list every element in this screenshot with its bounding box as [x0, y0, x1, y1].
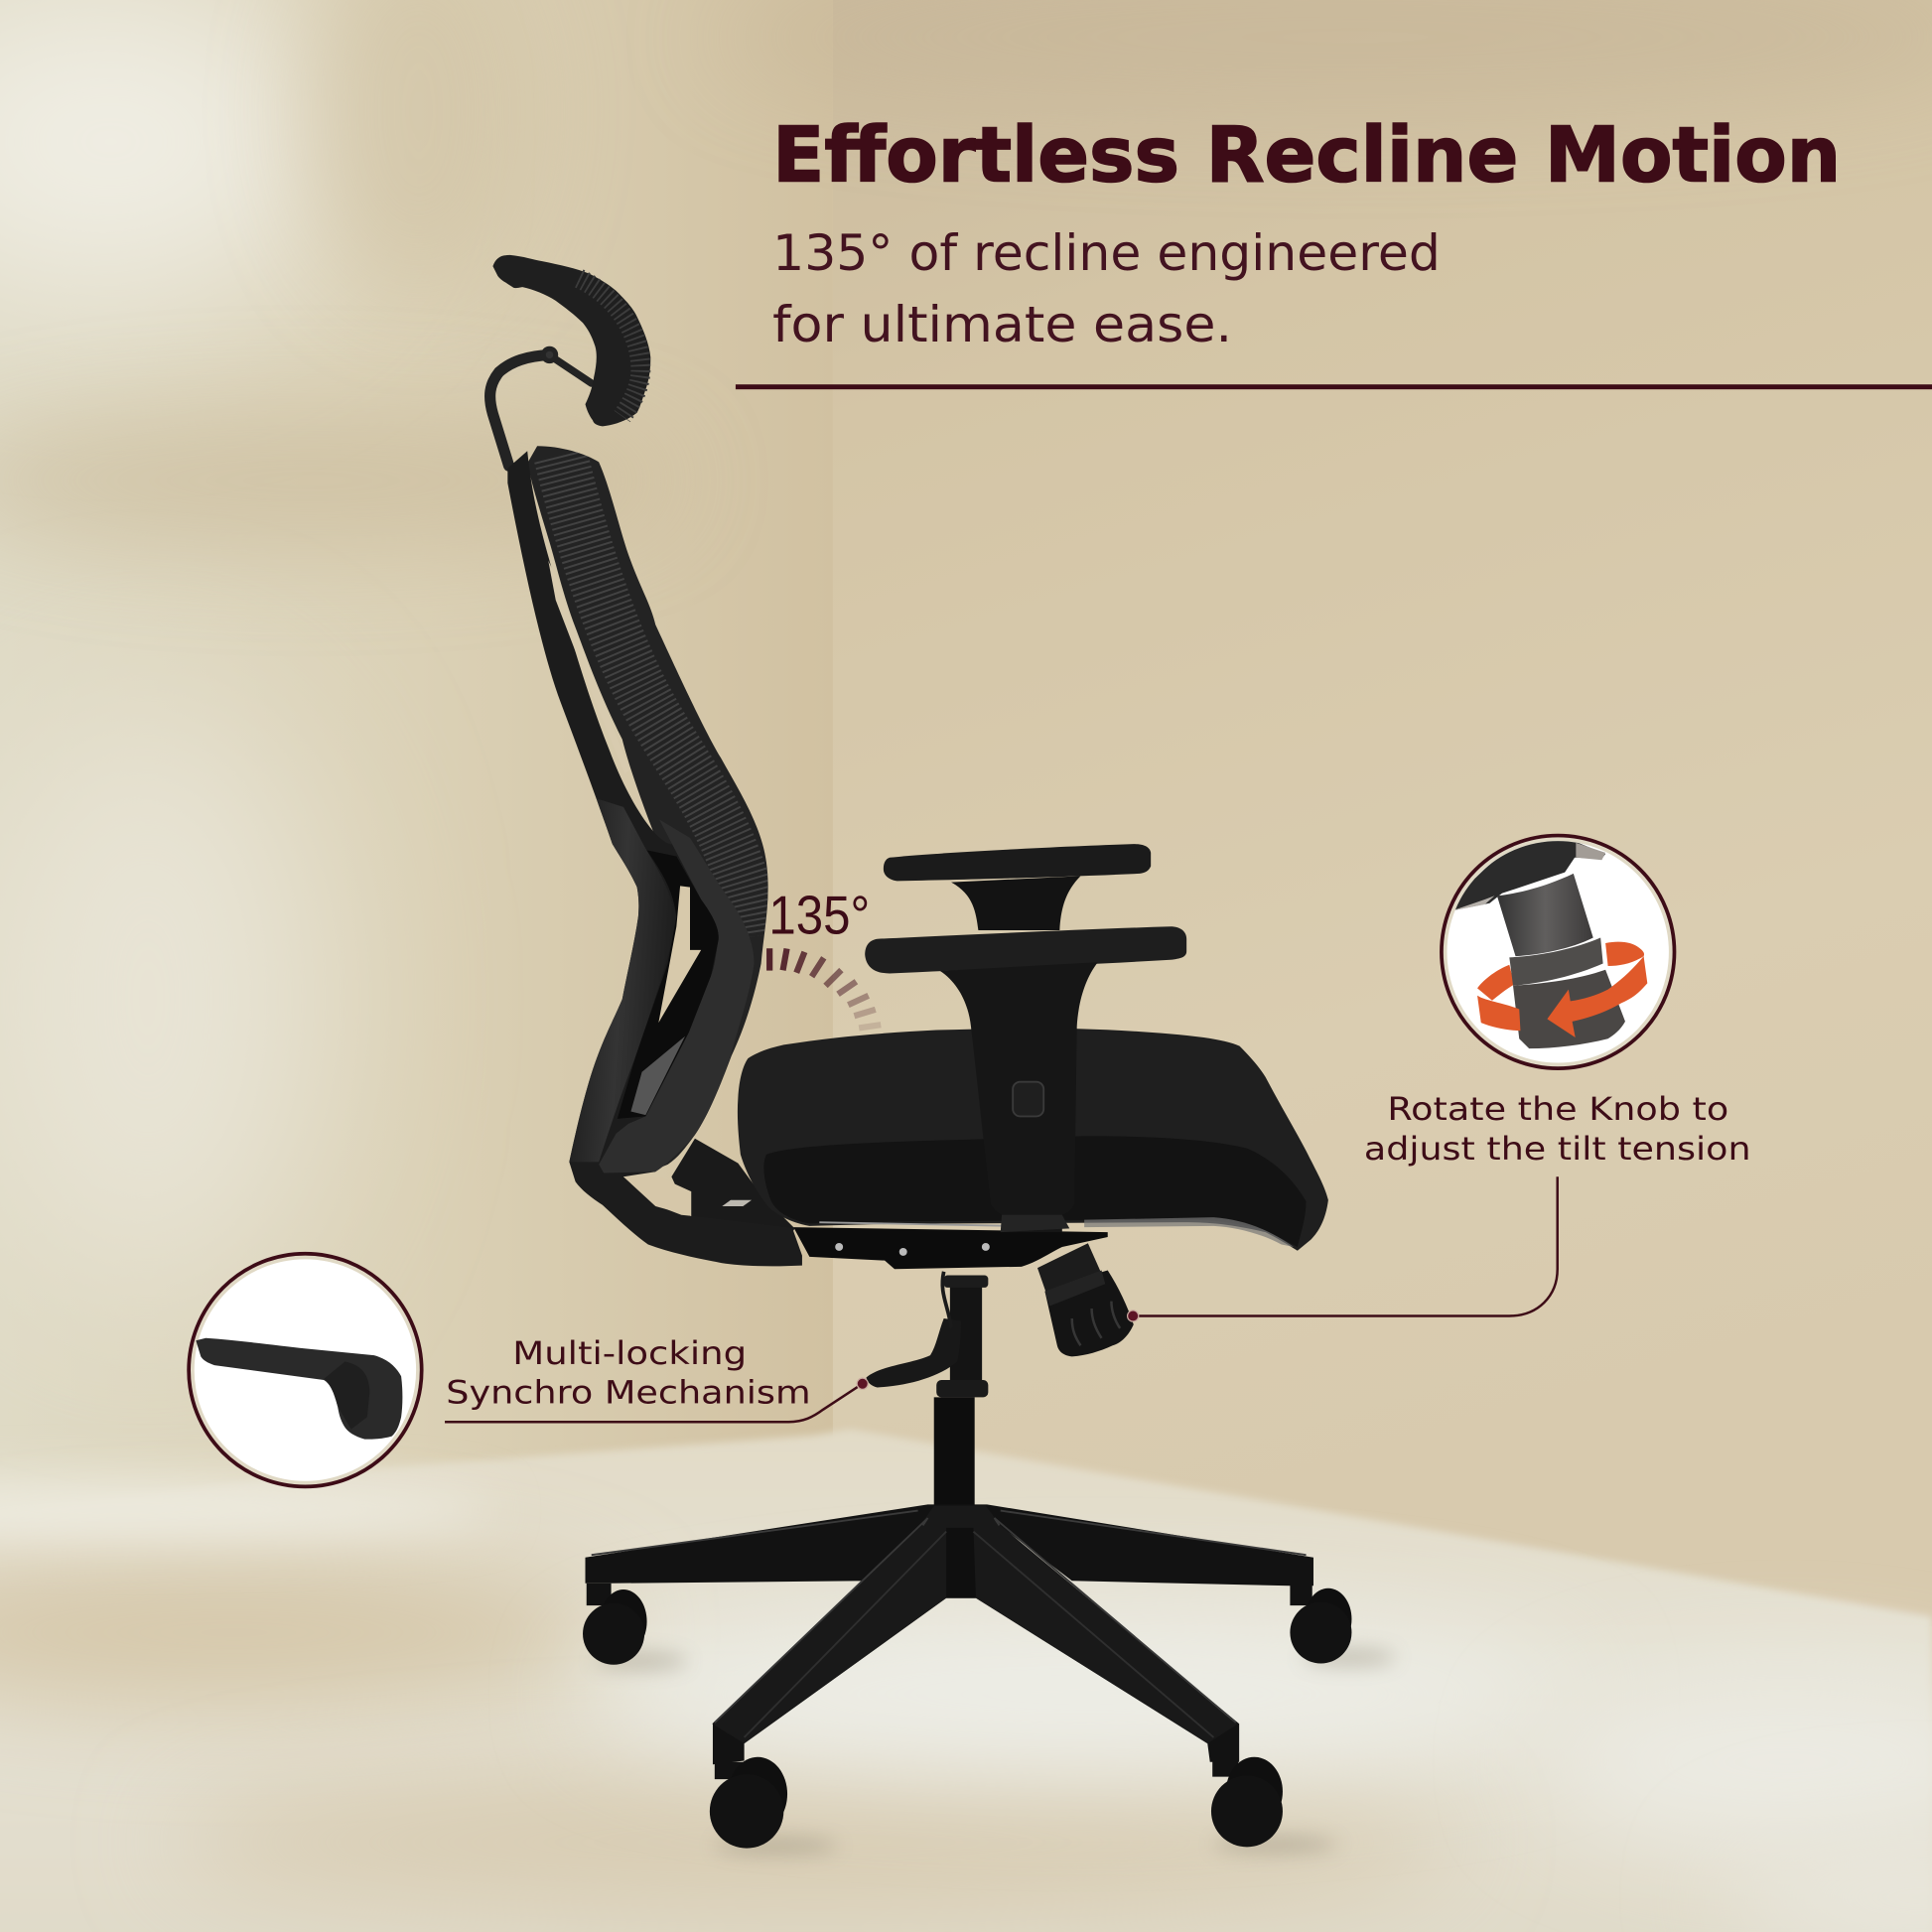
- subtitle: 135° of recline engineered: [772, 224, 1441, 282]
- gap in lower frame: [623, 1176, 691, 1216]
- panel: tilt tension knob detail: [1442, 836, 1674, 1068]
- orange rotation arrow, back band: [1477, 942, 1644, 1001]
- callout line: lever: [445, 1378, 868, 1422]
- interior dark panel: [618, 850, 719, 1119]
- label: synchro mechanism: [446, 1334, 811, 1412]
- lower armrest and post: [865, 926, 1186, 1232]
- backrest mesh: [527, 446, 768, 1171]
- support strut: [671, 1139, 794, 1238]
- knob upper band: [1509, 937, 1603, 986]
- recline lever: [866, 1318, 961, 1387]
- interior background gap: [658, 886, 701, 1023]
- gas lift column: [934, 1276, 988, 1512]
- label: tilt tension: [1364, 1090, 1751, 1168]
- knob lower grip: [1513, 970, 1625, 1048]
- header rule: [736, 384, 1932, 389]
- five-star base: [586, 1504, 1313, 1764]
- caster: front right: [1211, 1757, 1283, 1847]
- callout line: knob: [1128, 1176, 1558, 1321]
- tension knob: [1037, 1243, 1134, 1356]
- headrest: [492, 255, 650, 426]
- frame left bar highlight: [569, 798, 676, 1162]
- headrest support arm: [490, 348, 592, 466]
- lumbar mesh: [630, 1036, 685, 1115]
- subtitle: [772, 224, 1441, 353]
- orange rotation arrow, front band: [1477, 956, 1647, 1037]
- panel: synchro lever detail: [189, 1254, 422, 1486]
- upper armrest: [884, 844, 1151, 930]
- seat mechanism: [793, 1222, 1108, 1269]
- caster: rear right: [1290, 1584, 1351, 1663]
- headrest mesh texture: [579, 278, 640, 416]
- seat cushion: [738, 1029, 1328, 1251]
- title: Effortless Recline Motion: [772, 111, 1841, 200]
- floor shadows under chair: [594, 1649, 1396, 1855]
- office chair: [490, 255, 1351, 1849]
- recline angle label: 135°: [768, 886, 870, 946]
- knob cylinder: [1497, 874, 1593, 956]
- frame right bar highlight: [599, 819, 755, 1173]
- lever cable: [942, 1272, 951, 1328]
- light sliver through frame: [548, 561, 629, 773]
- caster: front left: [710, 1757, 787, 1849]
- seat bottom edge: [1084, 1217, 1294, 1247]
- subtitle: for ultimate ease.: [772, 296, 1232, 353]
- recline angle gauge: [769, 948, 881, 1028]
- mechanism arm: [1452, 839, 1605, 910]
- backrest frame: [507, 451, 802, 1266]
- label: tilt tension: adjust the tilt tension: [1364, 1130, 1751, 1168]
- caster: rear left: [583, 1584, 647, 1665]
- label: synchro mechanism: Synchro Mechanism: [446, 1374, 811, 1412]
- label: tilt tension: Rotate the Knob to: [1387, 1090, 1728, 1128]
- label: synchro mechanism: Multi-locking: [512, 1334, 747, 1372]
- seat lower band: [763, 1136, 1307, 1247]
